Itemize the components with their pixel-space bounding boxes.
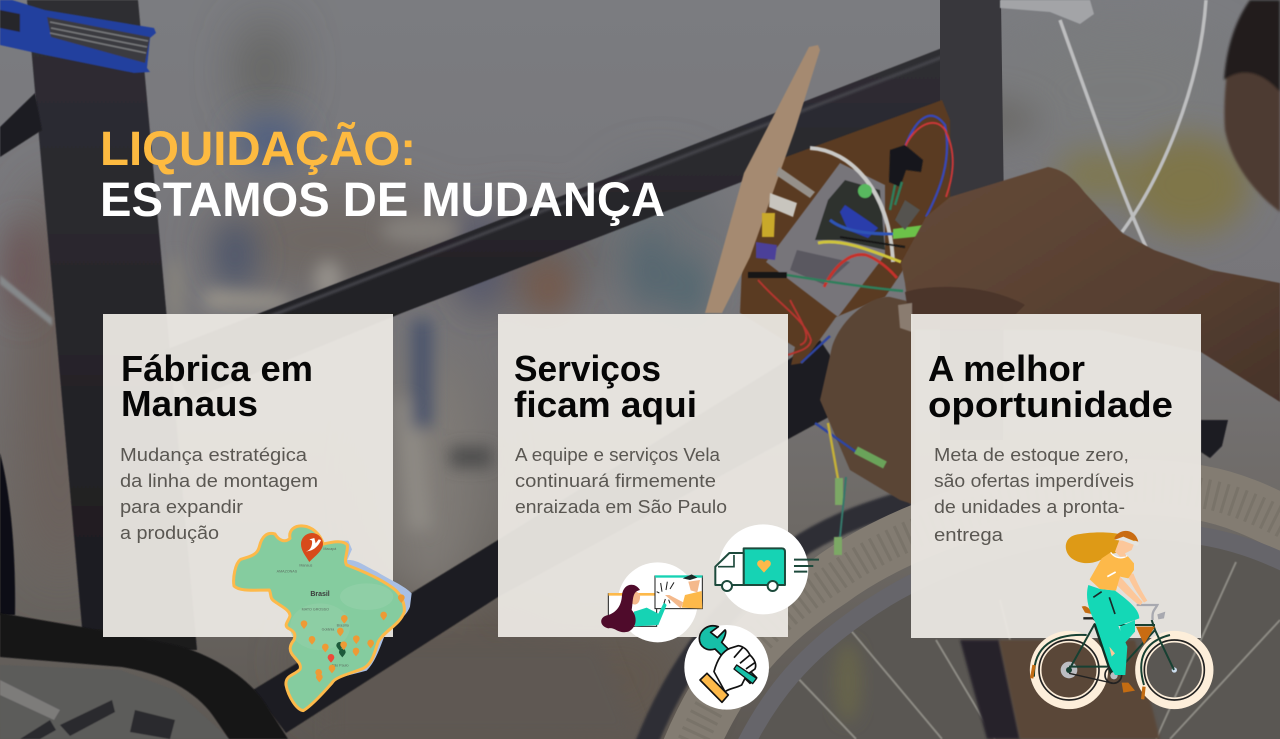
bottom left black fork bbox=[0, 613, 288, 739]
map labels: Macapá bbox=[323, 547, 337, 551]
bag and handlebar bbox=[1082, 605, 1165, 644]
map labels: AMAZONAS bbox=[277, 570, 298, 574]
cardboard panel bbox=[705, 45, 820, 313]
left vertical tube bbox=[27, 0, 197, 650]
Vela location pin bbox=[301, 533, 323, 562]
panel: A melhor oportunidade bbox=[911, 314, 1201, 638]
body text: entrega bbox=[934, 525, 1004, 545]
icon: hand holding wrench bbox=[684, 625, 769, 710]
body text: enraizada em São Paulo bbox=[515, 497, 727, 517]
left diagonal strut bbox=[0, 93, 42, 157]
heading: ficam aqui bbox=[514, 384, 697, 425]
body text: Mudança estratégica bbox=[120, 445, 308, 465]
bicycle tyre and spokes bbox=[640, 420, 1280, 739]
white brake cables bbox=[1060, 0, 1206, 247]
panel: Serviços ficam aqui bbox=[498, 314, 788, 637]
panel: Fábrica em Manaus bbox=[103, 314, 393, 637]
blue clamp with folding tool bbox=[0, 0, 156, 73]
map labels: Brasil bbox=[310, 591, 330, 598]
illustration: high five, truck and wrench bbox=[601, 524, 819, 710]
icon: video call high five bbox=[601, 562, 702, 642]
heading: oportunidade bbox=[928, 384, 1173, 425]
heading: Serviços bbox=[514, 348, 661, 389]
heading bbox=[928, 348, 1173, 425]
seat tube bbox=[940, 0, 1004, 440]
body text bbox=[120, 445, 318, 543]
small orange pins bbox=[301, 594, 405, 682]
rear wheel bbox=[1032, 635, 1102, 703]
body text: a produção bbox=[120, 523, 219, 543]
body text: da linha de montagem bbox=[120, 471, 318, 491]
heading: A melhor bbox=[928, 348, 1085, 389]
brown electronics board bbox=[740, 100, 950, 365]
controller case bbox=[766, 163, 885, 317]
illustration: woman riding bicycle bbox=[1032, 531, 1208, 703]
bottom left chainring bbox=[0, 665, 230, 739]
map labels: MATO GROSSO bbox=[302, 608, 329, 612]
wires and connectors below the hand bbox=[815, 423, 885, 555]
body text bbox=[934, 445, 1134, 545]
body text: Meta de estoque zero, bbox=[934, 445, 1129, 465]
map of Brazil with pins bbox=[234, 526, 412, 711]
rider bbox=[1066, 531, 1147, 693]
left wheel edge bbox=[0, 453, 15, 615]
head at right bbox=[1224, 0, 1280, 212]
body text: continuará firmemente bbox=[515, 471, 716, 491]
body text: para expandir bbox=[120, 497, 243, 517]
map labels: Goiânia bbox=[322, 628, 335, 632]
bicycle frame bbox=[1069, 620, 1174, 683]
body text: A equipe e serviços Vela bbox=[515, 445, 721, 465]
heading bbox=[514, 348, 697, 425]
lower hand bbox=[820, 297, 915, 505]
title line 2: ESTAMOS DE MUDANÇA bbox=[100, 174, 665, 227]
body text: de unidades a pronta- bbox=[934, 497, 1125, 517]
heading bbox=[121, 348, 313, 424]
icon: delivery truck bbox=[715, 524, 819, 614]
map labels: Manaus bbox=[299, 564, 313, 568]
body text: são ofertas imperdíveis bbox=[934, 471, 1134, 491]
heading: Manaus bbox=[121, 383, 258, 424]
upper hand and forearm bbox=[898, 167, 1280, 402]
title bbox=[100, 121, 665, 227]
title line 1: LIQUIDAÇÃO: bbox=[100, 121, 416, 176]
map labels: Brasília bbox=[337, 624, 350, 628]
lower frame tube bbox=[253, 340, 860, 733]
body text bbox=[515, 445, 727, 517]
map labels: São Paulo bbox=[332, 664, 349, 668]
top frame tube bbox=[165, 48, 956, 400]
brake lever bbox=[1000, 0, 1094, 24]
map labels bbox=[277, 547, 350, 668]
front wheel bbox=[1141, 635, 1208, 703]
heading: Fábrica em bbox=[121, 348, 313, 389]
electronics and wiring bbox=[748, 116, 953, 363]
green and red pins bbox=[328, 641, 347, 663]
